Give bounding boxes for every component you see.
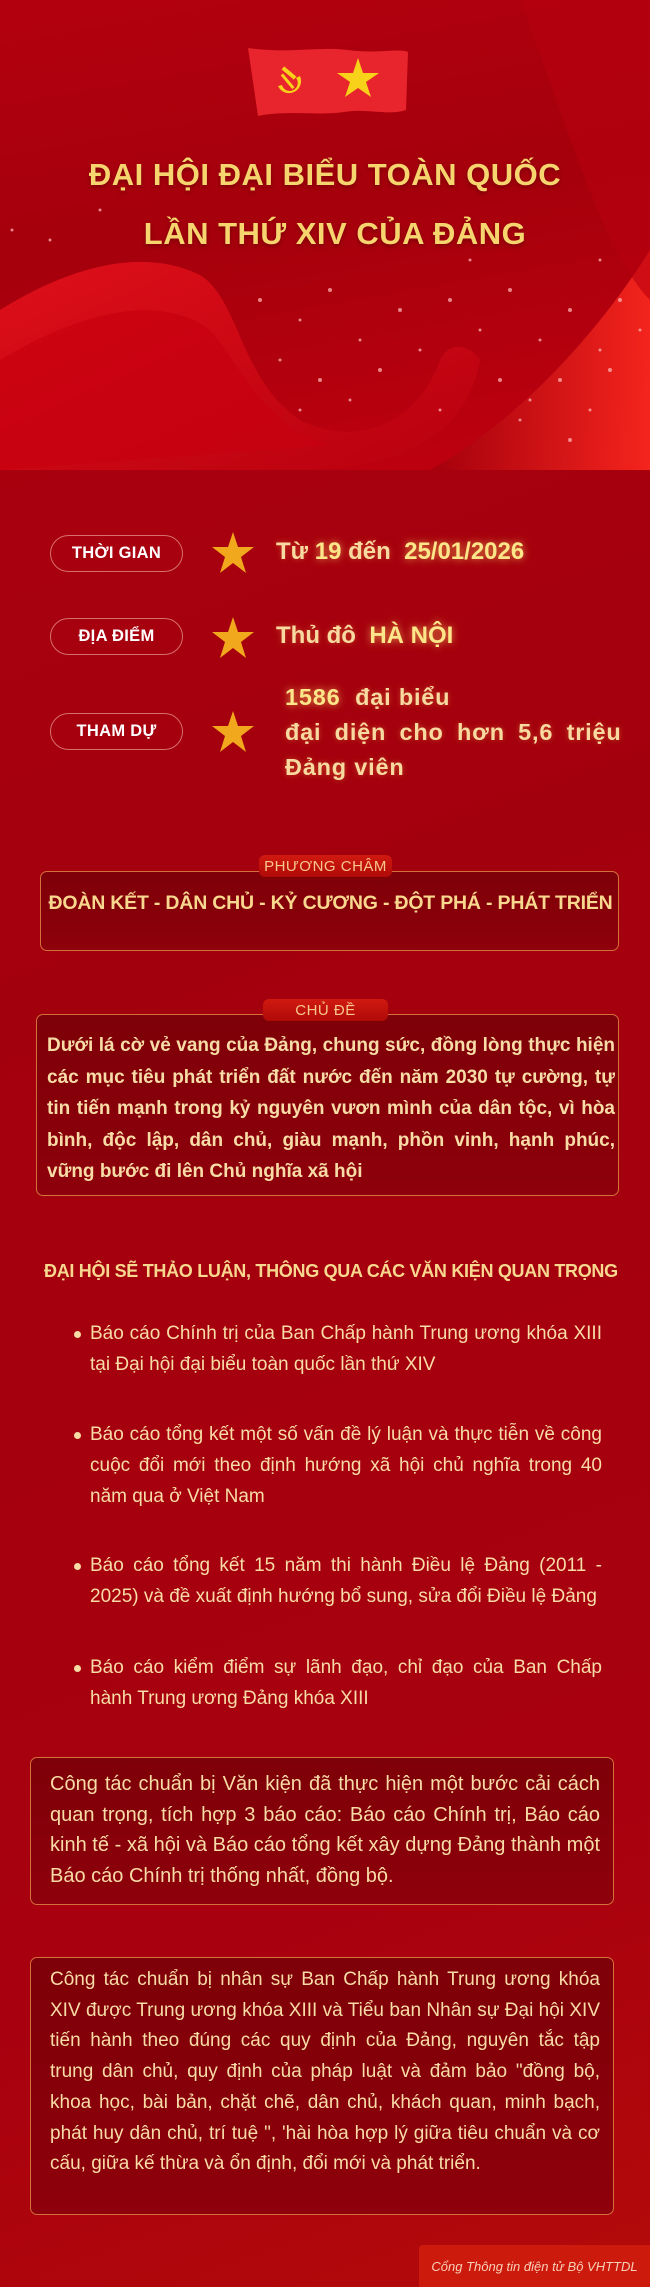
text: attendees: đại diện cho hơn 5,6 triệu [285,719,622,745]
tab: chủ đề: CHỦ ĐỀ [295,1002,356,1018]
icon: star 1 [212,532,254,573]
header banner [0,0,650,470]
pill: địa điểm [50,618,183,655]
text: attendees [282,684,622,782]
tab: chủ đề [263,999,388,1021]
panel: phương châm [40,871,619,951]
pill: địa điểm: ĐỊA ĐIỂM [78,627,155,645]
title: ĐẠI HỘI ĐẠI BIỂU TOÀN QUỐC [89,157,561,192]
text: attendees: Đảng viên [285,754,405,780]
pill: tham dự [50,713,183,750]
icon: hammer and sickle [278,66,301,93]
text: Công tác chuẩn bị Văn kiện đã thực hiện một bước cải cách quan trọng, tích hợp 3 báo cáo: Báo cáo Chính trị, Báo cáo kinh tế - xã hội và Báo cáo tổng kết xây dựng Đảng thành một Báo cáo Chính trị thống nhất, đồng bộ. [50,1773,600,1887]
tab: phương châm: PHƯƠNG CHÂM [264,858,387,874]
icon: star 2 [212,617,254,658]
text: Công tác chuẩn bị nhân sự Ban Chấp hành Trung ương khóa XIV được Trung ương khóa XIII và Tiểu ban Nhân sự Đại hội XIV tiến hành theo đúng các quy định của Đảng, nguyên tắc tập trung dân chủ, quy định của pháp luật và đảm bảo "đồng bộ, khoa học, bài bản, chặt chẽ, dân chủ, khách quan, minh bạch, phát huy dân chủ, trí tuệ ", 'hài hòa hợp lý giữa tiêu chuẩn và cơ cấu, giữa kế thừa và ổn định, đổi mới và phát triển. [50,1969,600,2174]
text: motto: ĐOÀN KẾT - DÂN CHỦ - KỶ CƯƠNG - ĐỘT PHÁ - PHÁT TRIỂN [48,892,613,914]
text: time: Từ 19 đến 25/01/2026 [276,538,524,565]
panel: chủ đề [36,1014,619,1196]
icon: star [337,58,379,97]
text: theme: Dưới lá cờ vẻ vang của Đảng, chung sức, đồng lòng thực hiện các mục tiêu phát triển đất nước đến năm 2030 tự cường, tự tin tiến mạnh trong kỷ nguyên vươn mình của dân tộc, vì hòa bình, độc lập, dân chủ, giàu mạnh, phồn vinh, hạnh phúc, vững bước đi lên Chủ nghĩa xã hội [47,1035,615,1182]
bullet list [74,1323,602,1709]
text: attendees: 1586 đại biểu [285,684,450,710]
heading: documents: ĐẠI HỘI SẼ THẢO LUẬN, THÔNG QUA CÁC VĂN KIỆN QUAN TRỌNG [44,1261,618,1281]
flag [248,48,408,116]
title [88,157,561,251]
text: place: Thủ đô HÀ NỘI [276,622,453,649]
bullet 4: Báo cáo kiểm điểm sự lãnh đạo, chỉ đạo của Ban Chấp hành Trung ương Đảng khóa XIII [90,1657,602,1709]
bullet 1: Báo cáo Chính trị của Ban Chấp hành Trung ương khóa XIII tại Đại hội đại biểu toàn quốc lần thứ XIV [90,1323,602,1375]
pill: tham dự: THAM DỰ [77,722,156,740]
pill: thời gian: THỜI GIAN [72,544,161,562]
title: LẦN THỨ XIV CỦA ĐẢNG [144,216,526,251]
bullet 2: Báo cáo tổng kết một số vấn đề lý luận và thực tiễn về công cuộc đổi mới theo định hướng xã hội chủ nghĩa trong 40 năm qua ở Việt Nam [90,1424,602,1507]
footer: source [419,2245,650,2287]
panel: personnel preparation [30,1957,614,2215]
bullet 3: Báo cáo tổng kết 15 năm thi hành Điều lệ Đảng (2011 - 2025) và đề xuất định hướng bổ sung, sửa đổi Điều lệ Đảng [90,1555,602,1607]
icon: star 3 [212,711,254,752]
panel: document preparation [30,1757,614,1905]
pill: thời gian [50,535,183,572]
footer: source: Cổng Thông tin điện tử Bộ VHTTDL [431,2258,638,2274]
info rows [50,532,622,782]
